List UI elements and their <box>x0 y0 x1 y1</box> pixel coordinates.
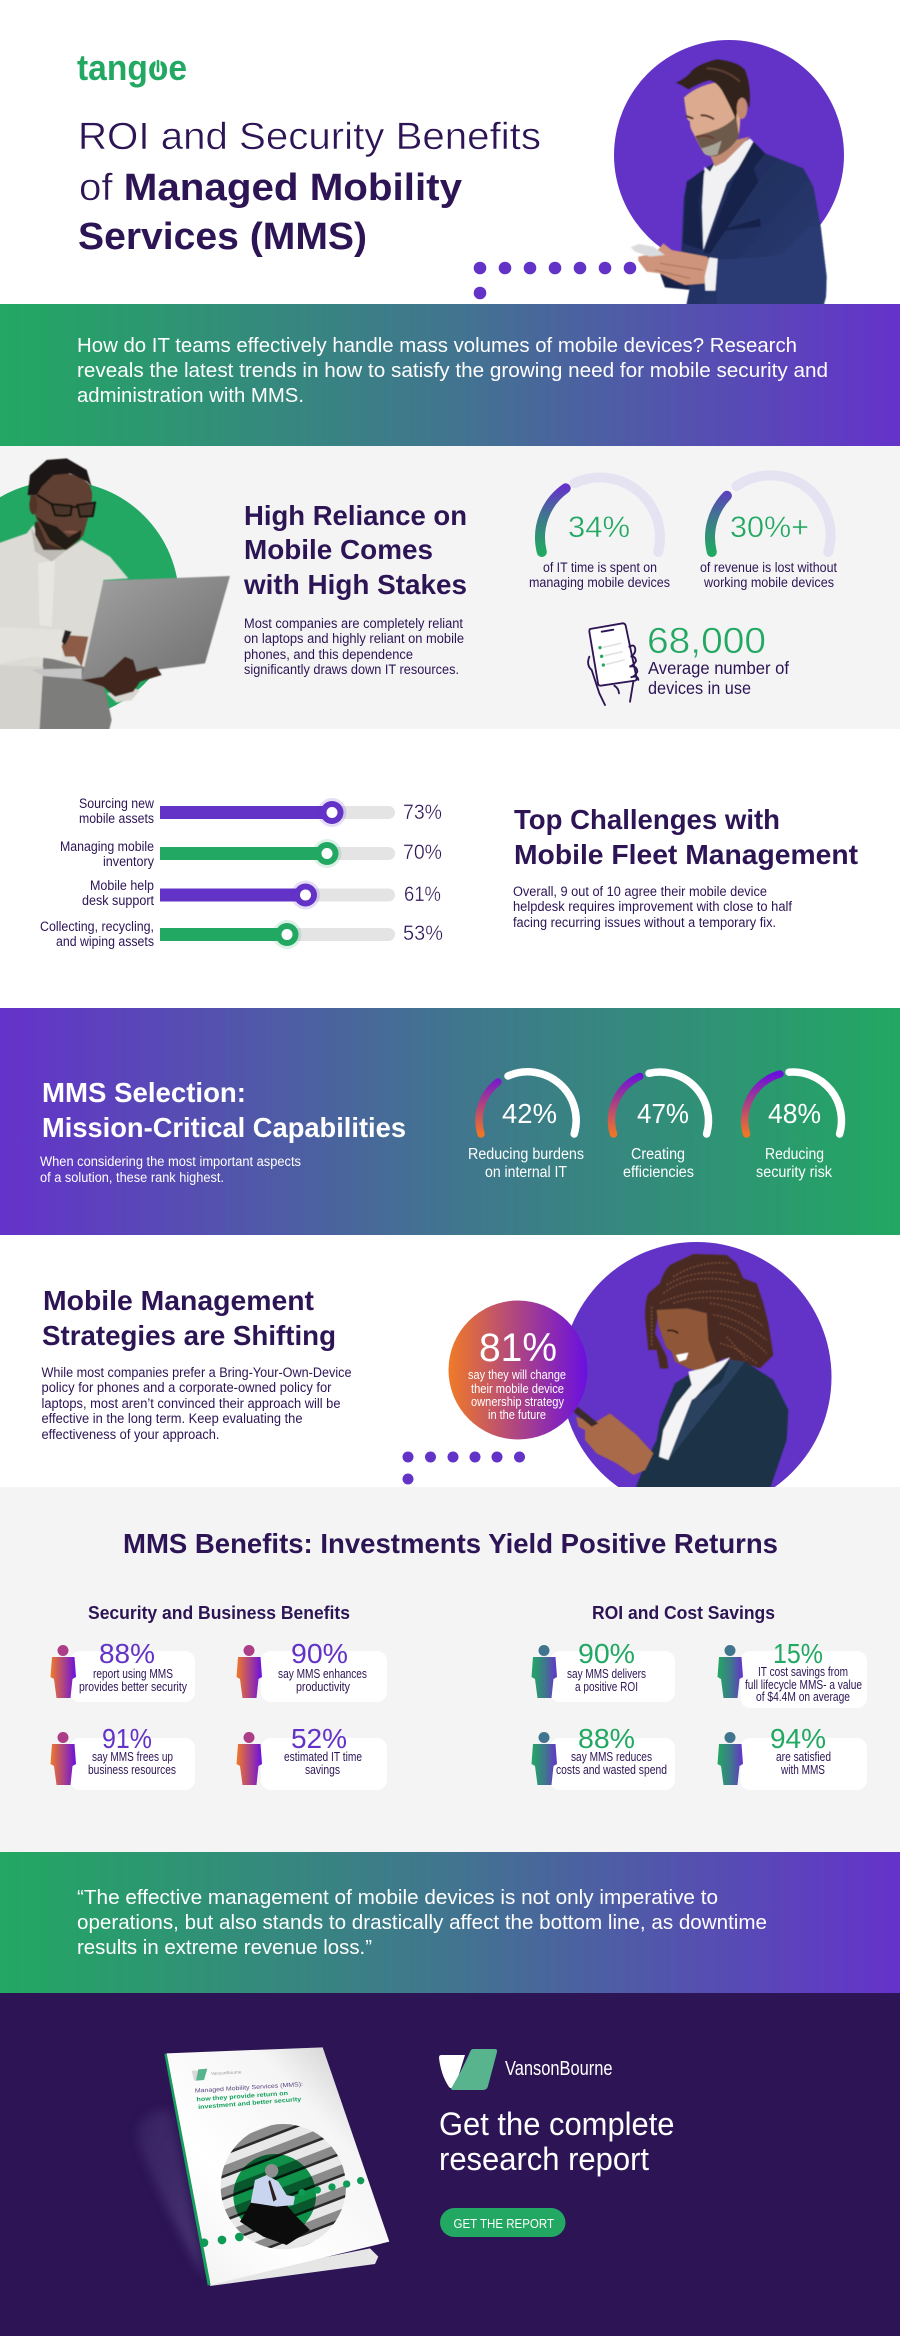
bar: sourcing new mobile assets 73%: Sourcing new <box>79 796 154 811</box>
gauge: 48%: security risk <box>756 1164 832 1181</box>
panel: get the report <box>0 1993 900 2336</box>
stat: 68,000: devices in use <box>648 678 751 698</box>
callout: 81%: in the future <box>488 1407 546 1422</box>
heading: MMS Benefits: Investments Yield Positive Returns <box>123 1528 778 1559</box>
stat: 68,000: Average number of <box>648 658 789 678</box>
heading: High Reliance on <box>244 500 467 531</box>
title <box>78 116 541 258</box>
green circle backdrop <box>0 481 179 719</box>
stat card: 52% IT time savings <box>236 1723 387 1790</box>
subheading: security and business benefits: Security and Business Benefits <box>88 1603 350 1623</box>
bar: sourcing new mobile assets 73%: 73% <box>403 801 442 824</box>
body text <box>244 616 464 677</box>
stat card: 91% business resources: say MMS frees up <box>92 1750 173 1764</box>
icon: hand holding phone <box>588 623 638 705</box>
body text <box>513 884 792 930</box>
report booklet <box>138 2047 389 2286</box>
title: Services (MMS) <box>78 216 367 258</box>
gauge: 42%: 42% <box>502 1098 557 1129</box>
cover dots <box>200 2177 364 2247</box>
stat card: 15% IT cost savings: of $4.4M on average <box>756 1690 850 1704</box>
stat card: 15% IT cost savings: 15% <box>773 1638 823 1669</box>
gauge: 47%: efficiencies <box>623 1164 694 1181</box>
body text: laptops, most aren’t convinced their approach will be <box>42 1396 340 1411</box>
photo: man with laptop <box>0 458 230 733</box>
dotted line <box>402 1452 525 1484</box>
body text: significantly draws down IT resources. <box>244 662 459 677</box>
body text <box>40 1154 301 1185</box>
stat card: 88% better security: 88% <box>99 1638 155 1669</box>
gauge: 42%: on internal IT <box>485 1164 567 1181</box>
stat card: 52% IT time savings: estimated IT time <box>284 1750 362 1764</box>
stat card: 88% reduces costs: 88% <box>578 1723 635 1754</box>
bar: mobile help desk support 61%: Mobile help <box>90 878 154 893</box>
stat card: 90% productivity: productivity <box>296 1680 351 1694</box>
panel: MMS benefits <box>0 1487 900 1852</box>
gauge: 30%+ <box>700 475 837 590</box>
body text: effective in the long term. Keep evaluating the <box>42 1411 302 1426</box>
logo: VansonBourne <box>439 2049 612 2090</box>
gauge: 48% <box>745 1072 842 1181</box>
panel: quote band <box>0 1852 900 1993</box>
purple circle backdrop <box>614 40 844 270</box>
intro text: administration with MMS. <box>77 385 304 407</box>
bar: collecting, recycling and wiping assets 53%: 53% <box>403 922 443 945</box>
stat card: 15% IT cost savings: full lifecycle MMS- a value <box>745 1678 862 1692</box>
bar: sourcing new mobile assets 73%: mobile assets <box>79 811 154 826</box>
stat card: 91% business resources: business resources <box>88 1763 176 1777</box>
body text: While most companies prefer a Bring-Your-Own-Device <box>42 1365 352 1380</box>
heading: with High Stakes <box>243 569 467 600</box>
body text: on laptops and highly reliant on mobile <box>244 631 464 646</box>
stat card: 88% reduces costs <box>532 1723 675 1790</box>
photo: man with phone <box>631 59 827 307</box>
body text: phones, and this dependence <box>244 647 413 662</box>
call to action heading: research report <box>439 2141 649 2177</box>
heading: Mobile Comes <box>244 534 433 565</box>
gauge: 30%+: of revenue is lost without <box>700 560 837 575</box>
stat card: 94% satisfied: are satisfied <box>776 1750 831 1764</box>
heading: MMS Selection: <box>42 1077 246 1108</box>
body text: helpdesk requires improvement with close to half <box>513 899 792 914</box>
cover photo <box>220 2124 346 2250</box>
heading <box>514 804 858 870</box>
stat card: 94% satisfied: with MMS <box>780 1763 825 1777</box>
gauge: 34% <box>529 478 670 590</box>
heading <box>42 1285 336 1351</box>
body text: Overall, 9 out of 10 agree their mobile device <box>513 884 767 899</box>
purple circle backdrop <box>568 1242 832 1487</box>
heading: Top Challenges with <box>514 804 780 835</box>
bar: collecting, recycling and wiping assets 53%: Collecting, recycling, <box>40 919 154 934</box>
cover title: Managed Mobility Services (MMS): <box>195 2082 304 2095</box>
intro text: reveals the latest trends in how to satisfy the growing need for mobile security and <box>77 360 828 382</box>
cover logo: VansonBourne <box>211 2069 242 2076</box>
heading: Mission-Critical Capabilities <box>42 1112 406 1143</box>
heading: Mobile Management <box>43 1285 314 1316</box>
bar: managing mobile inventory 70%: inventory <box>103 854 154 869</box>
intro text <box>77 335 828 407</box>
callout: 81%: 81% <box>479 1326 557 1370</box>
callout: 81% <box>448 1300 588 1440</box>
bar chart: challenges <box>40 796 443 949</box>
quote text: “The effective management of mobile devices is not only imperative to <box>77 1886 718 1909</box>
panel: mobile management strategies <box>42 1242 832 1487</box>
quote text: operations, but also stands to drastically affect the bottom line, as downtime <box>77 1911 767 1934</box>
stat card: 90% positive ROI: say MMS delivers <box>567 1667 646 1681</box>
logo: tangoe: tangoe <box>77 47 187 88</box>
stat card: 52% IT time savings: savings <box>305 1763 340 1777</box>
stat card: 15% IT cost savings <box>718 1638 867 1708</box>
heading: Mobile Fleet Management <box>514 839 858 870</box>
stat: 68,000: 68,000 <box>647 620 766 661</box>
callout: 81%: say they will change <box>468 1367 566 1382</box>
gauge: 47% <box>612 1072 709 1181</box>
quote text <box>77 1886 767 1959</box>
body text: facing recurring issues without a temporary fix. <box>513 915 776 930</box>
body text: effectiveness of your approach. <box>42 1427 220 1442</box>
stat card: 90% positive ROI: a positive ROI <box>575 1680 638 1694</box>
stat card: 15% IT cost savings: IT cost savings from <box>758 1665 848 1679</box>
bar: sourcing new mobile assets 73% <box>79 796 442 827</box>
call to action heading: Get the complete <box>439 2106 674 2142</box>
body text: When considering the most important aspects <box>40 1154 301 1169</box>
body text: of a solution, these rank highest. <box>40 1170 224 1185</box>
subheading: ROI and cost savings: ROI and Cost Savings <box>592 1603 775 1623</box>
gauge: 47%: 47% <box>637 1098 689 1129</box>
stat card: 88% better security <box>50 1638 195 1702</box>
stat card: 90% positive ROI <box>532 1638 675 1702</box>
photo: woman with phone <box>573 1254 788 1493</box>
stat card: 90% positive ROI: 90% <box>578 1638 635 1669</box>
button: get the report <box>440 2208 566 2237</box>
stat card: 52% IT time savings: 52% <box>291 1723 347 1754</box>
bar: mobile help desk support 61% <box>82 878 441 910</box>
gauge: 42%: Reducing burdens <box>468 1146 584 1163</box>
stat card: 90% productivity: 90% <box>291 1638 348 1669</box>
stat card: 91% business resources: 91% <box>102 1723 152 1754</box>
gauge: 30%+: working mobile devices <box>703 575 834 590</box>
stat card: 94% satisfied <box>718 1723 867 1790</box>
title: ROI and Security Benefits <box>78 116 541 158</box>
bar: mobile help desk support 61%: desk support <box>82 893 154 908</box>
cover title: investment and better security <box>198 2097 302 2111</box>
stat card: 88% reduces costs: costs and wasted spend <box>556 1763 667 1777</box>
body text <box>42 1365 352 1442</box>
stat card: 88% reduces costs: say MMS reduces <box>571 1750 652 1764</box>
title: of Managed Mobility <box>79 167 462 209</box>
gauge: 34%: of IT time is spent on <box>543 560 657 575</box>
button: get the report: GET THE REPORT <box>454 2216 554 2231</box>
stat card: 91% business resources <box>50 1723 195 1790</box>
cover logo <box>192 2069 242 2081</box>
gauge: 34%: managing mobile devices <box>529 575 670 590</box>
cover title: how they provide return on <box>196 2091 289 2103</box>
stat card: 88% better security: provides better security <box>79 1680 188 1694</box>
gauge: 47%: Creating <box>631 1146 685 1163</box>
panel: MMS selection <box>0 1008 900 1235</box>
body text: Most companies are completely reliant <box>244 616 463 631</box>
logo: VansonBourne: VansonBourne <box>505 2058 612 2080</box>
call to action heading <box>439 2106 674 2177</box>
dotted line <box>474 262 636 299</box>
body text: policy for phones and a corporate-owned policy for <box>42 1380 332 1395</box>
callout: 81%: ownership strategy <box>471 1394 564 1409</box>
callout: 81%: their mobile device <box>471 1381 564 1396</box>
gauge: 48%: 48% <box>768 1098 821 1129</box>
heading <box>243 500 467 600</box>
panel: top challenges <box>0 729 900 1008</box>
gauge: 30%+: 30%+ <box>730 511 809 544</box>
panel: intro gradient band <box>0 304 900 446</box>
heading: Strategies are Shifting <box>42 1320 336 1351</box>
intro text: How do IT teams effectively handle mass volumes of mobile devices? Research <box>77 335 797 357</box>
bar: mobile help desk support 61%: 61% <box>404 883 441 906</box>
panel: high reliance on mobile <box>0 446 900 733</box>
stat card: 94% satisfied: 94% <box>770 1723 826 1754</box>
stat card: 90% productivity: say MMS enhances <box>278 1667 367 1681</box>
heading <box>42 1077 406 1143</box>
gauge: 34%: 34% <box>568 511 630 544</box>
bar: managing mobile inventory 70%: 70% <box>403 841 442 864</box>
quote text: results in extreme revenue loss.” <box>77 1936 372 1959</box>
stat card: 88% better security: report using MMS <box>93 1667 173 1681</box>
stat card: 90% productivity <box>236 1638 387 1702</box>
bar: managing mobile inventory 70%: Managing mobile <box>60 839 154 854</box>
bar: collecting, recycling and wiping assets 53% <box>40 919 443 949</box>
gauge: 48%: Reducing <box>765 1146 824 1163</box>
gauge: 42% <box>468 1072 584 1181</box>
bar: collecting, recycling and wiping assets 53%: and wiping assets <box>56 934 154 949</box>
bar: managing mobile inventory 70% <box>60 839 442 869</box>
stat: 68,000 <box>647 620 789 698</box>
panel: header <box>0 0 900 307</box>
cover title <box>195 2082 304 2111</box>
